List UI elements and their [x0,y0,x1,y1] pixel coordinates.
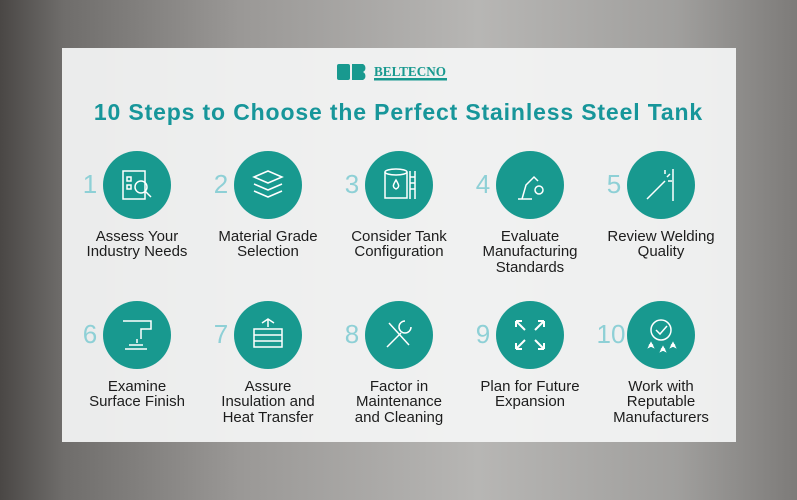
step 3 [345,151,447,260]
logo: BELTECNO [374,64,446,79]
step 10 [597,301,709,426]
text: Examine [108,378,166,395]
step 4 [476,151,578,276]
text: 7 [214,319,228,349]
step 1 [83,151,187,260]
text: Maintenance [356,393,442,410]
text: 9 [476,319,490,349]
logo [337,64,447,80]
text: 6 [83,319,97,349]
title: 10 Steps to Choose the Perfect Stainless Steel Tank [94,99,703,125]
step 9 [476,301,580,410]
text: Expansion [495,393,565,410]
text: 5 [607,169,621,199]
step 2 [214,151,318,260]
text: 3 [345,169,359,199]
text: Factor in [370,378,428,395]
text: Review Welding [607,228,715,245]
text: Material Grade [218,228,318,245]
step 5 [607,151,715,260]
text: Heat Transfer [223,409,313,426]
text: Assess Your [96,228,178,245]
text: 8 [345,319,359,349]
text: 4 [476,169,490,199]
text: Industry Needs [87,243,187,260]
step 7 [214,301,315,426]
text: Assure [245,378,291,395]
text: Reputable [627,393,695,410]
text: Work with [628,378,694,395]
panel [62,48,736,442]
text: Selection [237,243,299,260]
step 6 [83,301,185,410]
text: Standards [496,259,564,276]
text: and Cleaning [355,409,443,426]
text: Insulation and [221,393,315,410]
step 8 [345,301,443,426]
text: 2 [214,169,228,199]
text: Manufacturers [613,409,709,426]
text: 1 [83,169,97,199]
text: Consider Tank [351,228,447,245]
text: Manufacturing [482,243,578,260]
text: Evaluate [501,228,559,245]
text: Quality [638,243,684,260]
text: Surface Finish [89,393,185,410]
text: Plan for Future [480,378,580,395]
text: Configuration [354,243,444,260]
text: 10 [597,319,625,349]
